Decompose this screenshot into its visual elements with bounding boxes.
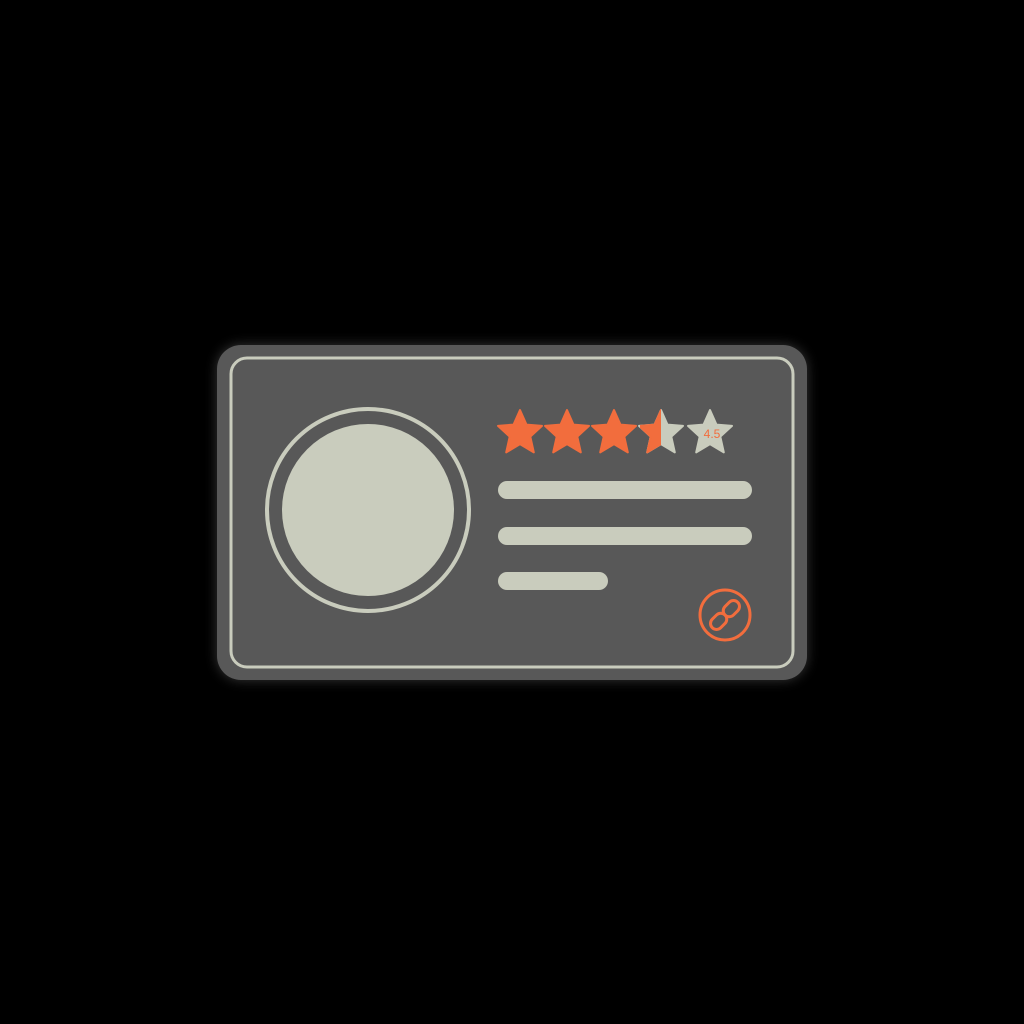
avatar circle bbox=[267, 409, 469, 611]
icon: link bbox=[700, 590, 750, 640]
text line bars bbox=[498, 481, 752, 590]
rating number: 4.5 bbox=[704, 427, 721, 441]
card bbox=[217, 345, 807, 680]
star rating bbox=[498, 410, 732, 452]
